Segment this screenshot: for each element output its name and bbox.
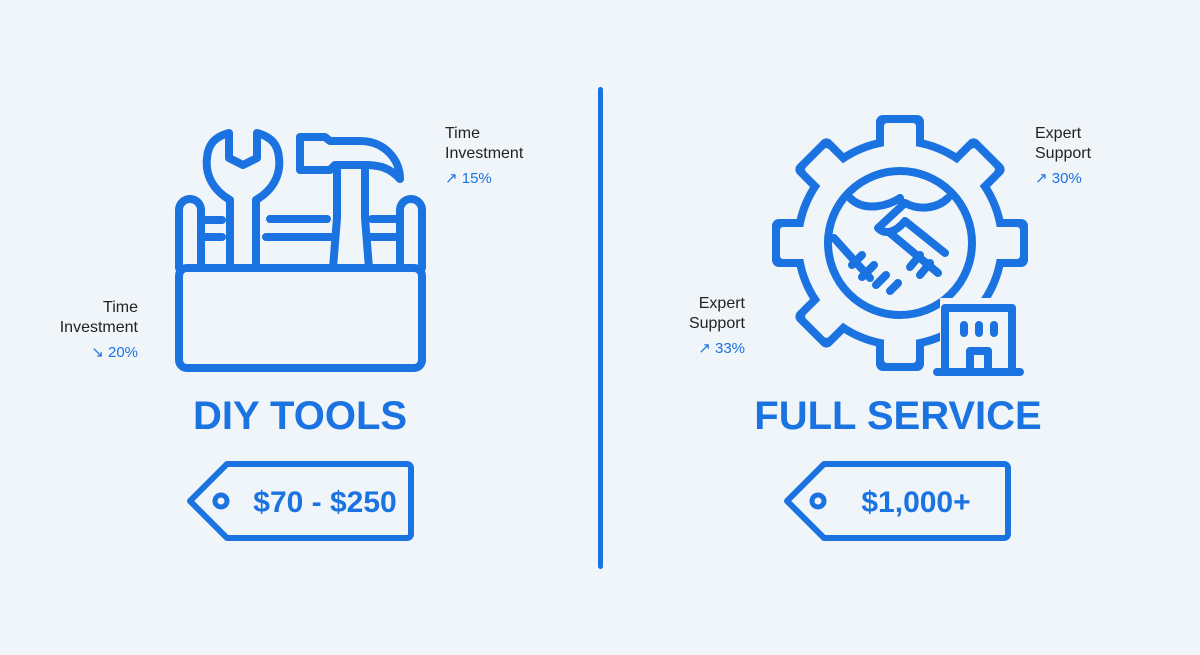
text: DIY top right (445, 125, 524, 187)
text: DIY left: Investment (60, 319, 138, 336)
text: full top right: ↗ 30% (1035, 170, 1082, 187)
text: DIY left (60, 299, 138, 361)
text: full top right (1035, 125, 1091, 187)
text: DIY left: ↘ 20% (91, 344, 138, 361)
heading: FULL SERVICE: FULL SERVICE (754, 394, 1042, 438)
heading: DIY TOOLS: DIY TOOLS (193, 394, 407, 438)
icon: toolbox (175, 129, 426, 372)
hammer (300, 137, 400, 179)
price tag: full (784, 461, 1011, 541)
price tag: full: $1,000+ (861, 486, 971, 519)
text: full top right: Expert (1035, 125, 1081, 142)
text: full left: Expert (699, 295, 745, 312)
text: full left: ↗ 33% (698, 340, 745, 357)
icon: gear handshake (772, 115, 1028, 376)
text: DIY top right: Investment (445, 145, 523, 162)
text: DIY left: Time (103, 299, 138, 316)
text: full left (689, 295, 745, 357)
building (940, 298, 1020, 378)
price tag: DIY (187, 461, 414, 541)
divider (598, 87, 603, 569)
wrench (207, 133, 279, 268)
text: DIY top right: ↗ 15% (445, 170, 492, 187)
text: full top right: Support (1035, 145, 1091, 162)
price tag: DIY: $70 - $250 (253, 486, 397, 519)
text: full left: Support (689, 315, 745, 332)
text: DIY top right: Time (445, 125, 480, 142)
box (179, 268, 422, 368)
